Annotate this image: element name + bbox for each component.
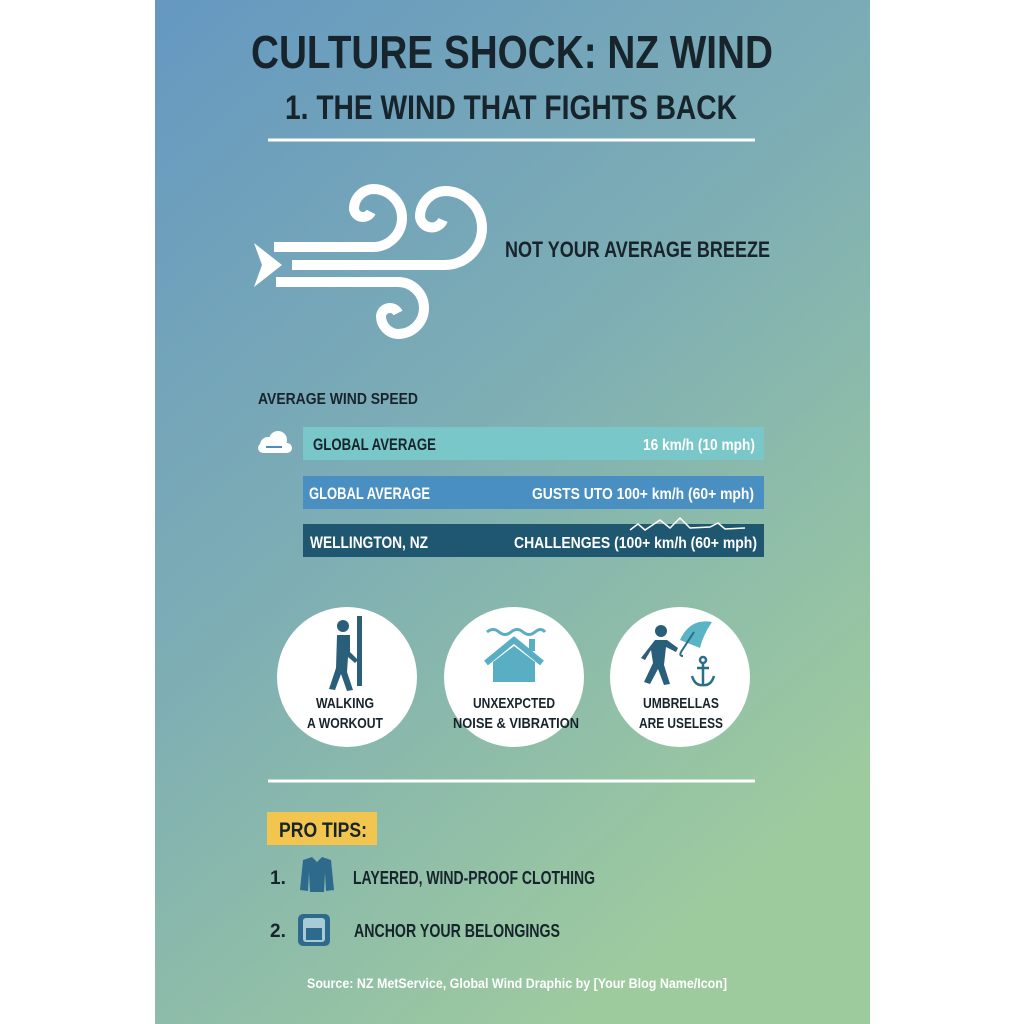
tip 1: LAYERED, WIND-PROOF CLOTHING <box>353 868 595 888</box>
subtitle: 1. THE WIND THAT FIGHTS BACK <box>285 89 737 127</box>
icon: cloud <box>258 431 292 453</box>
tip 2: ANCHOR YOUR BELONGINGS <box>354 921 560 941</box>
tip 2 <box>270 914 560 946</box>
panel: noise and vibration: UNXEXPCTED <box>473 695 555 712</box>
icon: house with wind <box>486 630 545 682</box>
panel: background <box>155 0 870 1024</box>
bar: global average: GLOBAL AVERAGE <box>313 435 436 454</box>
bar: wellington: WELLINGTON, NZ <box>310 533 428 552</box>
panel: noise and vibration: NOISE & VIBRATION <box>453 715 579 732</box>
label: pro tips <box>267 812 377 845</box>
bar: global average: 16 km/h (10 mph) <box>643 437 755 454</box>
label: pro tips: PRO TIPS: <box>279 819 367 842</box>
source footer: Source: NZ MetService, Global Wind Draphic by [Your Blog Name/Icon] <box>307 975 727 991</box>
heading: average wind speed: AVERAGE WIND SPEED <box>258 391 418 408</box>
panel: walking a workout: WALKING <box>316 695 374 712</box>
panel: noise and vibration <box>444 607 584 747</box>
panel: umbrellas are useless: ARE USELESS <box>639 715 723 732</box>
icon: walker with pole <box>329 616 362 691</box>
icon: jacket <box>300 857 334 892</box>
tip 1: 1. <box>270 868 286 889</box>
bar: wellington <box>303 518 764 557</box>
bar: global average gusts: GLOBAL AVERAGE <box>309 484 430 503</box>
panel: walking a workout <box>277 607 417 747</box>
icon: wind swirls <box>254 189 482 334</box>
title: CULTURE SHOCK: NZ WIND <box>251 26 773 78</box>
text: not your average breeze: NOT YOUR AVERAGE BREEZE <box>505 237 770 262</box>
panel: umbrellas are useless <box>610 607 750 747</box>
bar: global average <box>303 427 764 460</box>
bar: global average gusts: GUSTS UTO 100+ km/h (60+ mph) <box>532 486 754 503</box>
tip 2: 2. <box>270 921 286 942</box>
icon: person, umbrella, anchor <box>641 625 678 685</box>
tip 1 <box>270 857 595 892</box>
panel: walking a workout: A WORKOUT <box>307 715 383 732</box>
icon: backpack <box>298 914 330 946</box>
panel: umbrellas are useless: UMBRELLAS <box>643 695 719 712</box>
bar: wellington: CHALLENGES (100+ km/h (60+ mph) <box>514 535 757 552</box>
bar: global average gusts <box>303 476 764 509</box>
